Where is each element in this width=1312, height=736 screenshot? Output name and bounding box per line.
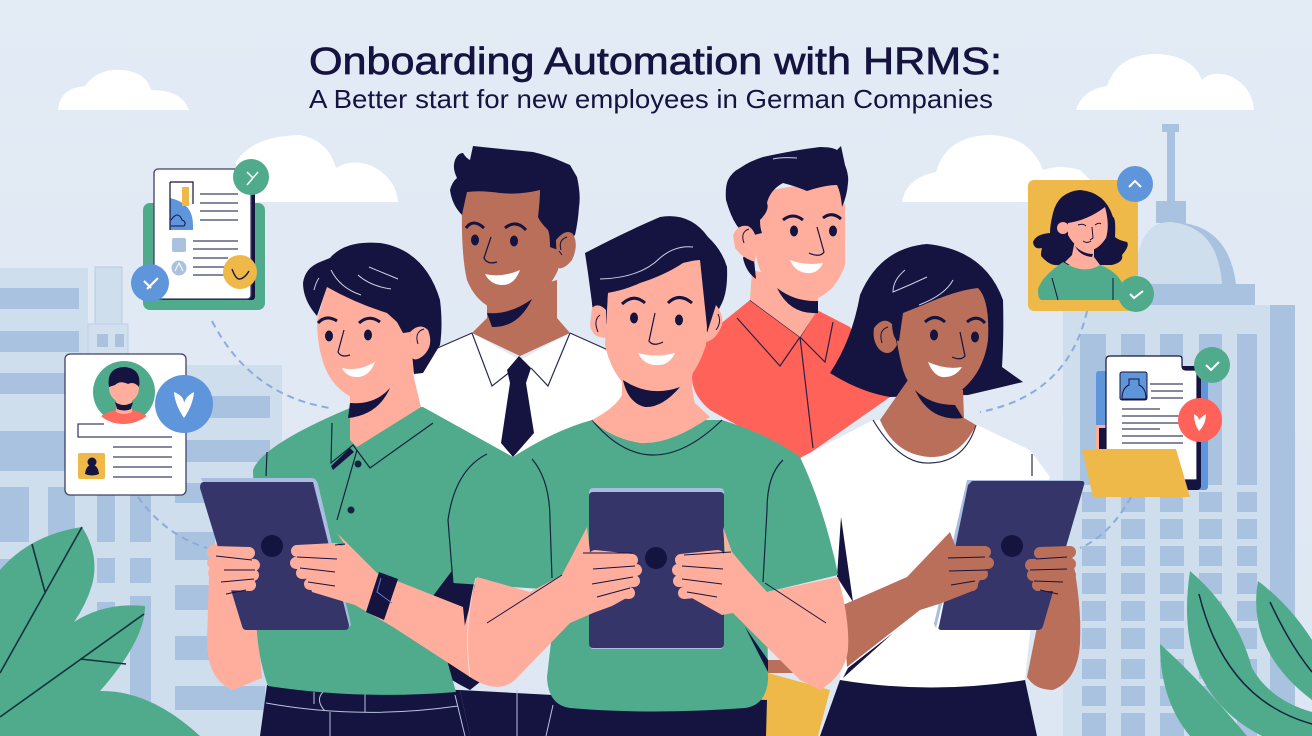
person: back right man in red shirt — [692, 146, 890, 460]
hair — [726, 146, 848, 236]
left plant — [0, 527, 200, 736]
face details — [930, 330, 938, 340]
neck — [592, 370, 710, 443]
hair tail — [743, 240, 756, 279]
face — [752, 180, 845, 302]
face details — [790, 226, 798, 236]
face — [317, 287, 415, 403]
hair — [1033, 190, 1128, 265]
person: centre man in green t-shirt — [448, 216, 848, 736]
shirt — [448, 420, 838, 712]
face — [462, 185, 558, 313]
right plant — [1160, 571, 1312, 736]
hair — [585, 216, 727, 333]
neck — [350, 370, 421, 447]
document and folder card: right — [1082, 347, 1230, 497]
document card: top left — [131, 159, 269, 310]
tie — [501, 356, 534, 457]
tablet — [934, 480, 1082, 628]
watch — [366, 572, 398, 620]
face details — [325, 330, 333, 342]
ear — [874, 321, 897, 353]
left background buildings — [0, 267, 282, 736]
hair back — [830, 244, 1023, 397]
shirt — [253, 407, 513, 695]
dashed connector lines — [138, 311, 1131, 548]
title: Onboarding Automation with HRMS: — [309, 41, 1002, 83]
right arm — [1027, 547, 1080, 690]
person: front right woman in white t-shirt — [758, 244, 1084, 736]
hair — [303, 243, 442, 374]
person: front left man in green polo — [200, 243, 520, 736]
ear — [733, 226, 757, 262]
tablet — [589, 488, 724, 649]
tablet — [201, 478, 351, 630]
shirt — [413, 333, 622, 470]
left arm — [207, 540, 262, 690]
hand and forearm — [300, 533, 470, 677]
hair — [450, 146, 580, 250]
right arm — [683, 527, 848, 690]
ear — [410, 326, 430, 359]
neck — [880, 380, 976, 457]
pants — [460, 690, 767, 736]
face — [605, 260, 707, 398]
face details — [630, 312, 638, 324]
ear — [556, 232, 576, 268]
dark shirt shadow — [393, 520, 520, 690]
finger strokes — [595, 556, 718, 593]
portrait card: top right — [1028, 166, 1154, 312]
face — [897, 288, 988, 403]
shirt — [800, 420, 1050, 688]
neck — [472, 280, 570, 356]
ears — [590, 305, 606, 338]
face details — [471, 234, 479, 246]
yellow object — [758, 673, 830, 736]
person: back left man in white shirt — [413, 146, 622, 470]
forearm and left hand — [843, 532, 985, 667]
face — [1068, 207, 1108, 250]
shirt — [692, 300, 890, 460]
right background building with dome — [1063, 124, 1295, 736]
neck — [750, 270, 818, 337]
pants — [820, 680, 1037, 736]
pants — [260, 685, 470, 736]
shirt — [1038, 262, 1123, 300]
neck — [1065, 240, 1100, 269]
subtitle: A Better start for new employees in German Companies — [309, 84, 993, 114]
background clouds — [58, 54, 1254, 202]
left arm — [462, 527, 630, 687]
profile card: left — [65, 354, 213, 495]
